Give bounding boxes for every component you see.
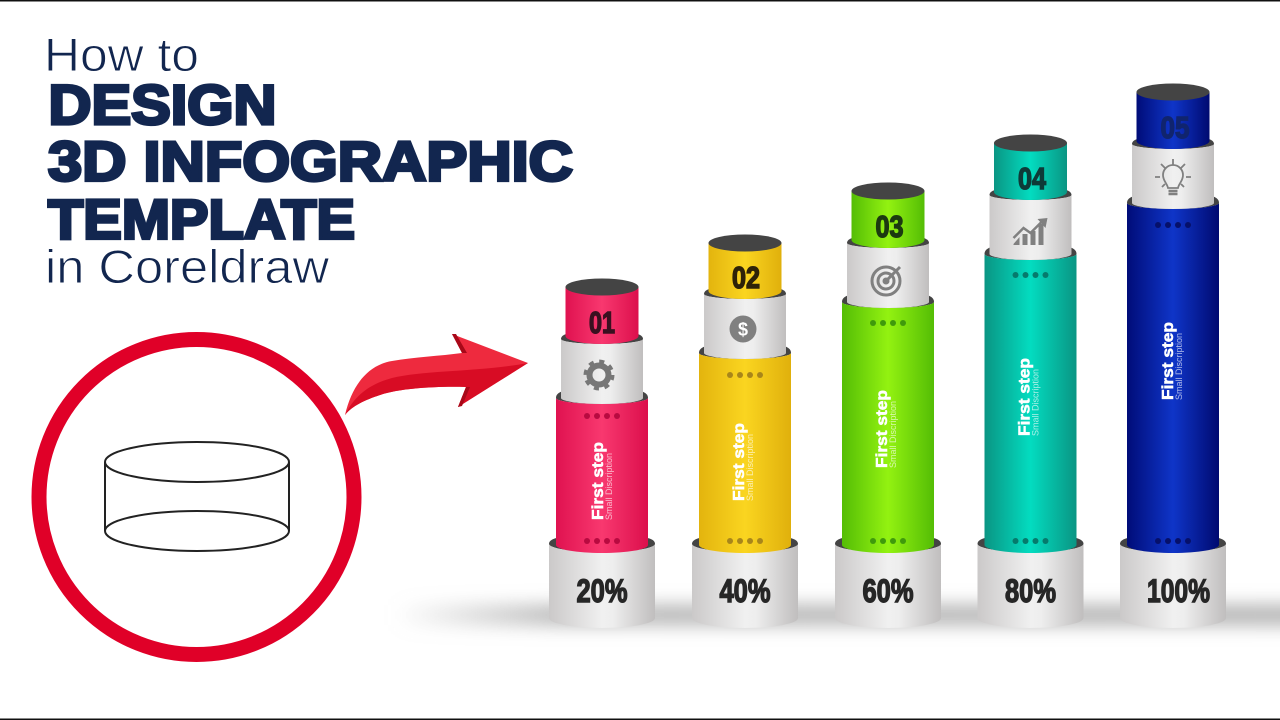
- number: 05: [1160, 110, 1190, 145]
- body cylinder: [556, 388, 648, 553]
- number: 04: [1018, 161, 1047, 196]
- top cylinder: [852, 182, 924, 248]
- number: 02: [732, 260, 760, 295]
- base cylinder: [835, 535, 941, 628]
- column 2: [692, 234, 798, 628]
- icon: dollar coin: [730, 316, 756, 342]
- label: First step: [874, 390, 891, 468]
- dots bottom: [1155, 538, 1191, 544]
- dots top: [584, 413, 620, 419]
- column 1: [549, 278, 655, 628]
- dots top: [727, 372, 763, 378]
- top cylinder: [994, 134, 1067, 200]
- icon: target: [872, 267, 900, 295]
- title line: How to: How to: [44, 28, 199, 81]
- icon: light bulb: [1155, 159, 1191, 194]
- label: First step: [590, 442, 607, 520]
- label: Small Discription: [604, 453, 614, 520]
- collar cylinder: [704, 286, 786, 359]
- floor shadow: [395, 605, 1280, 625]
- label: [874, 390, 898, 468]
- icon: cylinder outline: [105, 442, 289, 551]
- column 3: [835, 182, 941, 628]
- body cylinder: [984, 244, 1076, 553]
- collar cylinder: [990, 187, 1072, 260]
- top cylinder: [566, 278, 638, 344]
- label: [1160, 322, 1184, 400]
- label: Small Discription: [1030, 369, 1040, 436]
- number: 03: [876, 209, 904, 244]
- red circle with cylinder outline: [39, 340, 354, 654]
- dots top: [1155, 222, 1191, 228]
- percent: 40%: [720, 573, 770, 609]
- dots top: [870, 320, 906, 326]
- body cylinder: [842, 292, 934, 553]
- number: 01: [589, 305, 615, 340]
- base cylinder: [549, 535, 655, 628]
- base cylinder: [978, 535, 1084, 628]
- percent: 60%: [862, 573, 914, 609]
- title line: DESIGN: DESIGN: [48, 73, 276, 136]
- column 5: [1120, 84, 1226, 628]
- top cylinder: [1136, 84, 1210, 149]
- title: [44, 28, 573, 293]
- label: [731, 423, 755, 501]
- arrow: [345, 334, 528, 415]
- label: First step: [1016, 358, 1034, 436]
- title line: 3D INFOGRAPHIC: 3D INFOGRAPHIC: [48, 130, 573, 192]
- percent: 100%: [1147, 573, 1210, 609]
- label: First step: [731, 423, 748, 501]
- title line: TEMPLATE: TEMPLATE: [48, 188, 355, 250]
- bottom border line: [0, 718, 1280, 720]
- body cylinder: [699, 343, 791, 553]
- base cylinder: [692, 535, 798, 628]
- collar cylinder: [561, 331, 643, 404]
- top border line: [0, 0, 1280, 2]
- body cylinder: [1127, 193, 1219, 553]
- label: Small Discription: [745, 434, 755, 501]
- icon: dollar coin: $: [738, 320, 748, 340]
- title line: in Coreldraw: in Coreldraw: [45, 240, 330, 293]
- label: Small Discription: [1174, 333, 1184, 400]
- collar cylinder: [847, 235, 929, 308]
- dots bottom: [870, 538, 906, 544]
- label: [1016, 358, 1040, 436]
- percent: 20%: [576, 573, 628, 609]
- icon: growth chart: [1014, 218, 1048, 245]
- label: Small Discription: [888, 401, 898, 468]
- percent: 80%: [1005, 573, 1056, 609]
- dots bottom: [584, 538, 620, 544]
- top cylinder: [708, 234, 782, 299]
- label: [590, 442, 614, 520]
- dots top: [1012, 272, 1048, 278]
- column 4: [978, 134, 1084, 628]
- icon: gear: [586, 362, 612, 388]
- collar cylinder: [1132, 136, 1214, 209]
- dots bottom: [727, 538, 763, 544]
- red ring: [39, 340, 354, 654]
- label: First step: [1160, 322, 1177, 400]
- dots bottom: [1012, 538, 1048, 544]
- base cylinder: [1120, 535, 1226, 628]
